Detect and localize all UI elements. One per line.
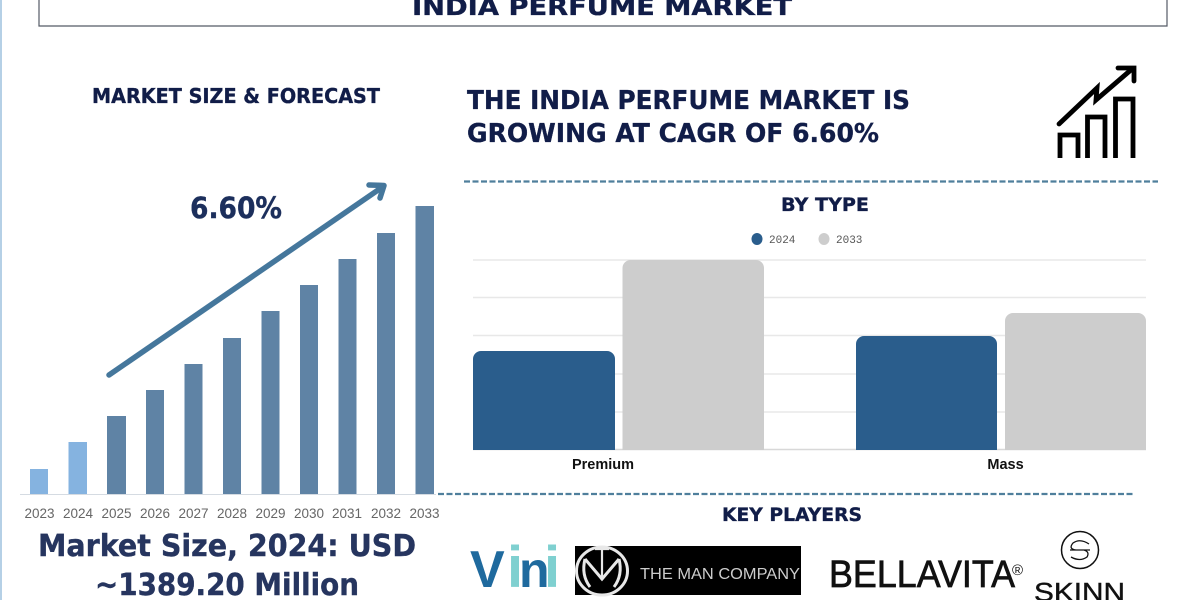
category labels: Mass bbox=[987, 457, 1024, 473]
year axis labels: 2026 bbox=[140, 506, 170, 521]
year axis labels: 2023 bbox=[24, 506, 55, 521]
logo: vini: n bbox=[519, 542, 550, 598]
heading: market size and forecast: MARKET SIZE & FORECAST bbox=[92, 84, 380, 108]
year axis labels: 2027 bbox=[178, 506, 209, 521]
chart gridlines bbox=[473, 260, 1146, 450]
logo: skinn bbox=[1034, 532, 1125, 600]
arrow: growth trend bbox=[109, 185, 384, 375]
market size callout: Market Size, 2024: USD bbox=[38, 529, 416, 564]
category labels: Premium bbox=[572, 457, 634, 473]
panel: market size and forecast bbox=[20, 84, 440, 600]
heading: by type: BY TYPE bbox=[781, 194, 869, 216]
market size callout bbox=[38, 529, 416, 600]
logo: bellavita: ® bbox=[1012, 562, 1023, 579]
logo: vini: V bbox=[470, 541, 505, 599]
year axis labels: 2031 bbox=[332, 506, 362, 521]
divider bottom bbox=[438, 493, 1133, 495]
divider top bbox=[464, 180, 1158, 183]
year axis labels: 2033 bbox=[409, 506, 440, 521]
year axis labels: 2025 bbox=[101, 506, 132, 521]
bar chart: premium vs mass bbox=[473, 260, 1146, 450]
heading: key players: KEY PLAYERS bbox=[722, 504, 862, 526]
headline text bbox=[467, 86, 910, 149]
year axis labels bbox=[24, 506, 440, 521]
legend bbox=[752, 233, 862, 247]
bar chart: market size by year bbox=[20, 206, 436, 495]
year axis labels: 2032 bbox=[371, 506, 401, 521]
panel: cagr headline bbox=[467, 68, 1134, 158]
panel: by type bbox=[473, 194, 1146, 473]
year axis labels: 2028 bbox=[217, 506, 247, 521]
icon: rising bars with arrow bbox=[1059, 68, 1134, 158]
panel: key players bbox=[470, 504, 1125, 600]
headline text: THE INDIA PERFUME MARKET IS bbox=[467, 86, 910, 116]
logo: the man company: THE MAN COMPANY bbox=[640, 566, 800, 583]
category labels bbox=[572, 457, 1024, 473]
year axis labels: 2024 bbox=[63, 506, 94, 521]
legend: 2024 bbox=[769, 235, 796, 247]
logo: vini: i bbox=[507, 535, 523, 600]
logo: the man company bbox=[575, 546, 801, 595]
year axis labels: 2030 bbox=[294, 506, 324, 521]
growth rate label: 6.60% bbox=[190, 191, 282, 225]
logo: bellavita: BELLAVITA bbox=[829, 554, 1016, 596]
logo: vini: i bbox=[544, 535, 560, 600]
title banner bbox=[39, 0, 1167, 26]
legend: 2033 bbox=[836, 235, 862, 247]
headline text: GROWING AT CAGR OF 6.60% bbox=[467, 119, 879, 149]
year axis labels: 2029 bbox=[255, 506, 286, 521]
